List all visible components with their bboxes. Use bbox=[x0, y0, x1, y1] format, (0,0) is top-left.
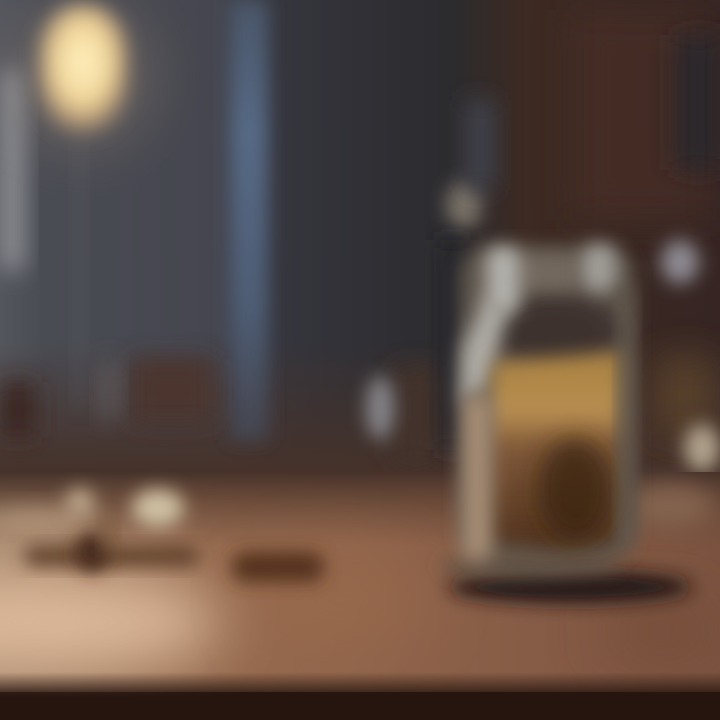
scattered items on table bbox=[24, 488, 324, 582]
jar saucer and shadow bbox=[440, 555, 692, 603]
jar bbox=[460, 244, 634, 560]
jar right edge bbox=[620, 290, 634, 550]
jar neck highlights bbox=[486, 246, 520, 314]
curtain: blue strip bbox=[230, 0, 268, 440]
jar dark upper interior bbox=[490, 292, 622, 372]
jar glass bbox=[460, 246, 634, 560]
jar neck between highlights bbox=[515, 256, 577, 290]
dark contents bbox=[537, 438, 613, 542]
background wall bbox=[0, 0, 720, 480]
jar lower-left glass bbox=[462, 395, 492, 560]
background objects behind jar bbox=[366, 100, 720, 472]
table front edge bbox=[0, 672, 720, 720]
jar left highlight bbox=[460, 296, 508, 405]
wooden table bbox=[0, 472, 720, 692]
lamp post bbox=[74, 130, 84, 410]
jar contents bbox=[486, 352, 622, 548]
window strip at left edge bbox=[0, 70, 24, 270]
distant chairs bbox=[0, 358, 214, 438]
lamp glow bbox=[12, 4, 152, 145]
